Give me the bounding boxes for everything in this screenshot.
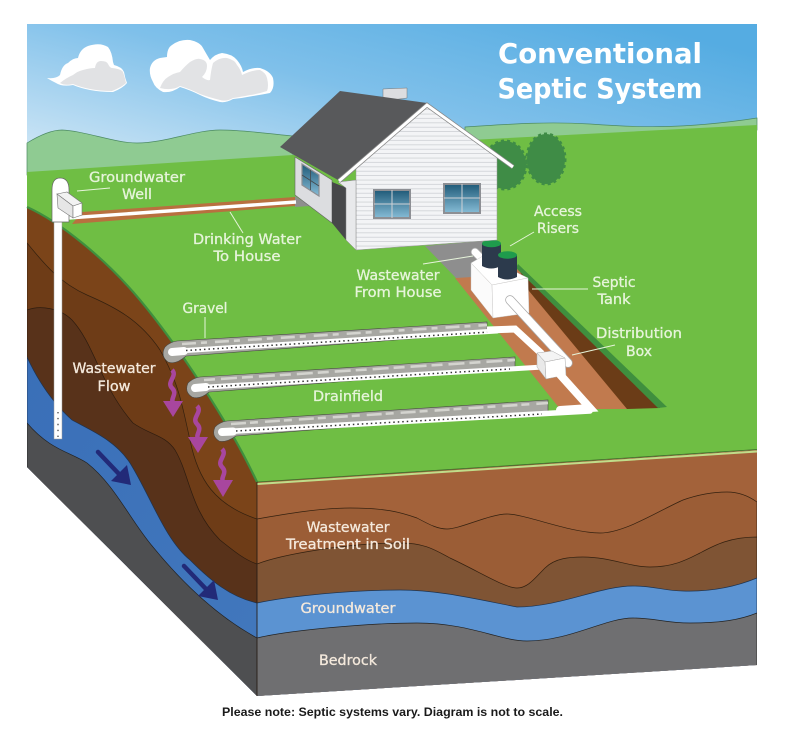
label: septic tank: Septic: [592, 275, 636, 291]
blue arrow 1: [98, 452, 131, 485]
drainfield lateral 3: [214, 400, 590, 441]
cloud: left: [47, 44, 127, 92]
label: access risers: Access: [534, 204, 582, 220]
grass field: [27, 125, 757, 482]
perforated pipe: [222, 411, 590, 432]
label: wastewater from house: Wastewater: [356, 268, 440, 284]
access risers: [482, 240, 517, 280]
label: drinking water to house: To House: [212, 249, 280, 265]
label: groundwater well: Well: [122, 187, 152, 203]
soil cross-section: left face: [27, 200, 258, 700]
wastewater flow arrows: [163, 370, 233, 497]
label: wastewater treatment in soil: [285, 520, 410, 553]
side wall: [295, 157, 332, 223]
drainfield lateral 1: [163, 322, 497, 363]
label: wastewater treatment in soil: Treatment in Soil: [285, 537, 410, 553]
septic tank: [471, 256, 529, 318]
concrete pad: [425, 241, 486, 278]
label: wastewater flow: Flow: [98, 379, 130, 395]
label: distribution box: [596, 326, 682, 360]
perforated pipe: [195, 367, 543, 388]
label: groundwater well: Groundwater: [89, 170, 185, 186]
pipe from house: [475, 252, 485, 262]
purple arrow 1: [163, 370, 183, 417]
gravel: [163, 322, 487, 363]
well screen dots: [57, 412, 59, 438]
roof: [280, 91, 427, 180]
title: Septic System: [498, 72, 702, 105]
label: wastewater from house: From House: [354, 285, 442, 301]
distribution box: [537, 351, 566, 379]
corner trim: [338, 180, 356, 250]
leader lines: [77, 188, 615, 355]
label: groundwater well: [89, 170, 185, 203]
grass edges: [27, 207, 757, 696]
label: drinking water to house: [193, 232, 301, 265]
house: [280, 88, 513, 250]
label: septic tank: [592, 275, 636, 308]
label: access risers: Risers: [537, 221, 579, 237]
label: septic tank: Tank: [596, 292, 631, 308]
drinking water pipe trench: [68, 196, 310, 224]
pipe start: [222, 428, 233, 436]
trench edge: [516, 264, 667, 408]
window: front right: [444, 184, 480, 213]
label: groundwater: Groundwater: [300, 601, 396, 617]
blue arrow 2: [184, 566, 218, 600]
chimney: [383, 88, 407, 100]
sky: [27, 24, 757, 174]
label: wastewater treatment in soil: Wastewater: [306, 520, 390, 536]
purple arrow 3: [213, 449, 233, 497]
label: distribution box: Box: [626, 344, 652, 360]
side window: [302, 164, 319, 196]
bushes: [484, 134, 565, 189]
label: wastewater from house: [354, 268, 442, 301]
recessed corner: [332, 182, 347, 240]
trench dark wall: [518, 267, 660, 409]
pipe start: [195, 387, 206, 388]
title: [498, 37, 702, 105]
cloud: right: [150, 40, 274, 102]
perforated pipe: [172, 331, 497, 351]
well box: [57, 192, 82, 218]
purple arrow 2: [188, 406, 208, 453]
well casing: [52, 178, 69, 222]
pipe perforations: [208, 369, 510, 387]
outlet pipe to third lateral: [555, 369, 590, 410]
roof trim white: [339, 105, 513, 181]
front wall: [356, 105, 497, 250]
gravel: [187, 357, 515, 398]
label: gravel: Gravel: [182, 301, 228, 317]
label: drinking water to house: Drinking Water: [193, 232, 301, 248]
label: distribution box: Distribution: [596, 326, 682, 342]
footnote: Please note: Septic systems vary. Diagram is not to scale.: [222, 707, 563, 719]
distribution piping: [487, 300, 568, 363]
drainfield lateral 2: [187, 357, 543, 398]
label: wastewater flow: [72, 361, 156, 395]
well: [52, 178, 82, 439]
pipe perforations: [236, 414, 542, 431]
window: front left: [374, 190, 410, 218]
groundwater flow arrows: [98, 452, 218, 600]
background hills: [27, 118, 757, 175]
pipe perforations: [186, 332, 490, 350]
pipe start: [172, 351, 184, 352]
label: wastewater flow: Wastewater: [72, 361, 156, 377]
pipe from house core: [475, 252, 485, 262]
label: bedrock: Bedrock: [319, 653, 378, 669]
gravel: [214, 400, 548, 441]
label: access risers: [534, 204, 582, 237]
trench dirt: [455, 267, 627, 409]
title: Conventional: [498, 37, 702, 70]
soil cross-section: front face: [257, 445, 757, 700]
roof trim grey: [339, 105, 513, 181]
well pipe: [54, 215, 62, 439]
label: drainfield: Drainfield: [313, 389, 383, 405]
